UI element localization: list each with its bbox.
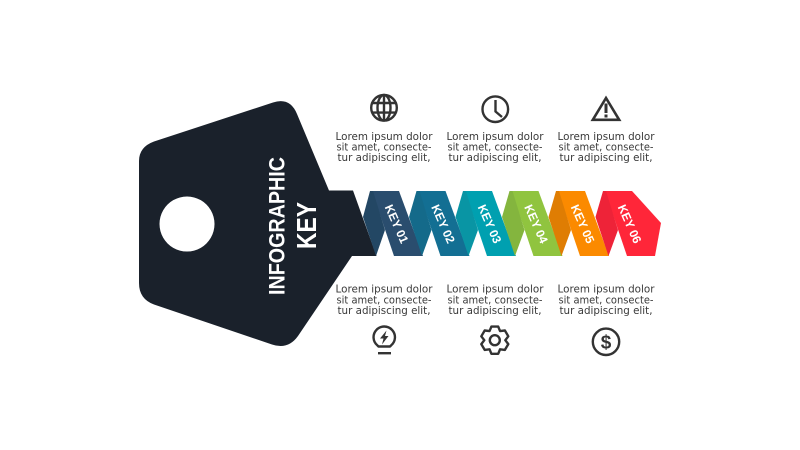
icon: light bulb [374,326,395,354]
ribbon: key 06: KEY 06 [615,202,644,246]
ribbon: key 04 [502,191,562,256]
text: top 3: sit amet, consecte- [558,142,654,154]
text: top 1: sit amet, consecte- [336,142,432,154]
text: bottom 1: tur adipiscing elit, [338,305,430,317]
text: top 1 [336,131,433,164]
text: top 2 [446,131,544,164]
ribbon: key 03: KEY 03 [475,202,504,246]
text: top 2: tur adipiscing elit, [448,152,542,164]
ribbon: key 05 [548,191,609,256]
icon: warning triangle [593,98,619,120]
text: bottom 2 [446,284,544,317]
ribbon: key 05: KEY 05 [568,202,597,246]
title [264,157,322,295]
icon: globe [371,95,397,121]
text: bottom 1: sit amet, consecte- [336,294,432,306]
text: bottom 3: sit amet, consecte- [558,294,654,306]
text: bottom 3: Lorem ipsum dolor [558,284,655,296]
text: top 1: tur adipiscing elit, [338,152,430,164]
icon: dollar coin [593,329,619,355]
ribbon: key 01 [363,191,423,256]
text: top 3 [558,131,655,164]
text: top 2: Lorem ipsum dolor [446,131,544,143]
text: top 2: sit amet, consecte- [448,142,543,154]
ribbon: key 01: KEY 01 [382,202,411,246]
icon: gear [481,327,508,354]
title: KEY [291,202,322,249]
text: bottom 2: sit amet, consecte- [448,294,543,306]
icon: dollar coin: $ [601,332,612,354]
text: top 1: Lorem ipsum dolor [336,131,433,143]
ribbon: key 06 [596,191,661,256]
icon: clock [482,96,508,122]
text: bottom 2: tur adipiscing elit, [448,305,542,317]
text: top 3: Lorem ipsum dolor [558,131,655,143]
ribbon: key 02: KEY 02 [428,202,458,246]
text: bottom 2: Lorem ipsum dolor [446,284,544,296]
text: bottom 3 [558,284,655,317]
key head [139,101,376,346]
ribbon: key 04: KEY 04 [521,202,551,246]
text: top 3: tur adipiscing elit, [560,152,652,164]
ribbon: key 03 [456,191,516,256]
text: bottom 1: Lorem ipsum dolor [336,284,433,296]
ribbon: key 02 [409,191,470,256]
title: INFOGRAPHIC [264,157,290,295]
text: bottom 1 [336,284,433,317]
text: bottom 3: tur adipiscing elit, [560,305,652,317]
